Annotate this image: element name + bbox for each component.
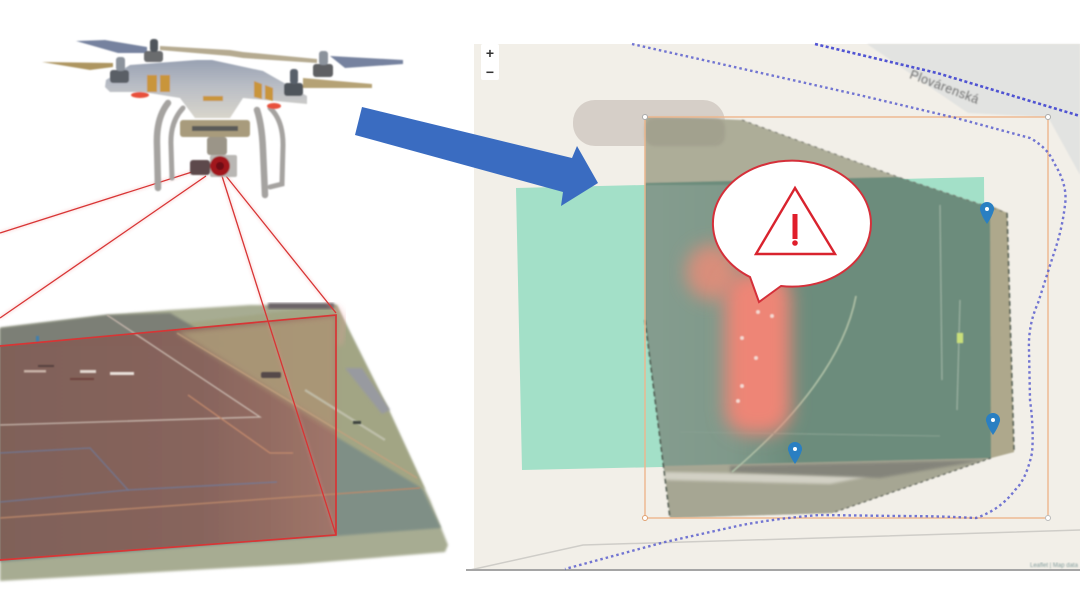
red heat blob: upper spot [686,244,738,300]
light strip [664,472,870,484]
drone orthophoto overlay [645,117,1014,518]
dark strip at field edge [268,303,334,309]
pitch markings [0,315,420,518]
icon: warning triangle [756,188,835,254]
gimbal mount [180,120,250,155]
field ground [0,305,448,581]
map background [474,44,1080,570]
roadside patch [345,368,390,414]
pitch area [645,177,991,470]
gold arm stripes [147,75,273,101]
red LEDs [131,92,281,109]
map bottom edge [466,569,1080,571]
pitch shading [646,185,790,469]
olive verge beyond diagonal [170,305,425,490]
arrow: blue arrow from drone to map [355,107,598,206]
body shell [105,60,307,118]
camera with red lens [190,155,237,177]
red detection volume [0,315,336,560]
green zone [516,177,986,470]
orthophoto base [645,117,1014,518]
dotted flight path: inner [565,44,1066,569]
players on pitch [24,336,361,424]
zoom control: + [486,45,494,61]
frustum rays and box outline [0,172,336,560]
red camera frustum lines [0,172,336,560]
motors [110,39,333,96]
frustum glow [0,172,336,535]
small marker on pitch [957,333,963,343]
grey road area [867,44,1080,175]
building seen through photo [645,118,725,146]
right tan strip [990,205,1014,458]
orange bounding rectangle [642,114,1050,520]
pitch lines [680,205,960,472]
jagged overlay edge [645,213,1014,518]
dark band [730,460,985,478]
jagged top diagonal [742,120,1007,213]
red glow on box corner [336,306,344,345]
panel: map view [466,44,1080,571]
zoom control [481,44,499,80]
jagged bottom diagonal [832,458,991,513]
olive corner inside volume [176,316,336,432]
map attribution: Leaflet | Map data [1030,563,1079,569]
bottom band [664,458,991,518]
road label: Plovárenská [908,68,981,107]
map pins [788,202,1000,464]
field pitch [0,333,441,562]
zoom control: − [486,64,494,80]
road line [470,530,1080,570]
icon: drone [42,39,403,195]
upper field dark area [0,313,225,347]
callout: warning speech bubble [713,161,871,302]
red heat blob: main column [725,272,791,434]
grey rounded building [573,100,725,146]
propellers [42,40,403,88]
white players in heat area [736,310,774,403]
dotted flight path: outer [815,44,1080,116]
panel: aerial field view [0,303,448,581]
landing gear [157,103,283,195]
